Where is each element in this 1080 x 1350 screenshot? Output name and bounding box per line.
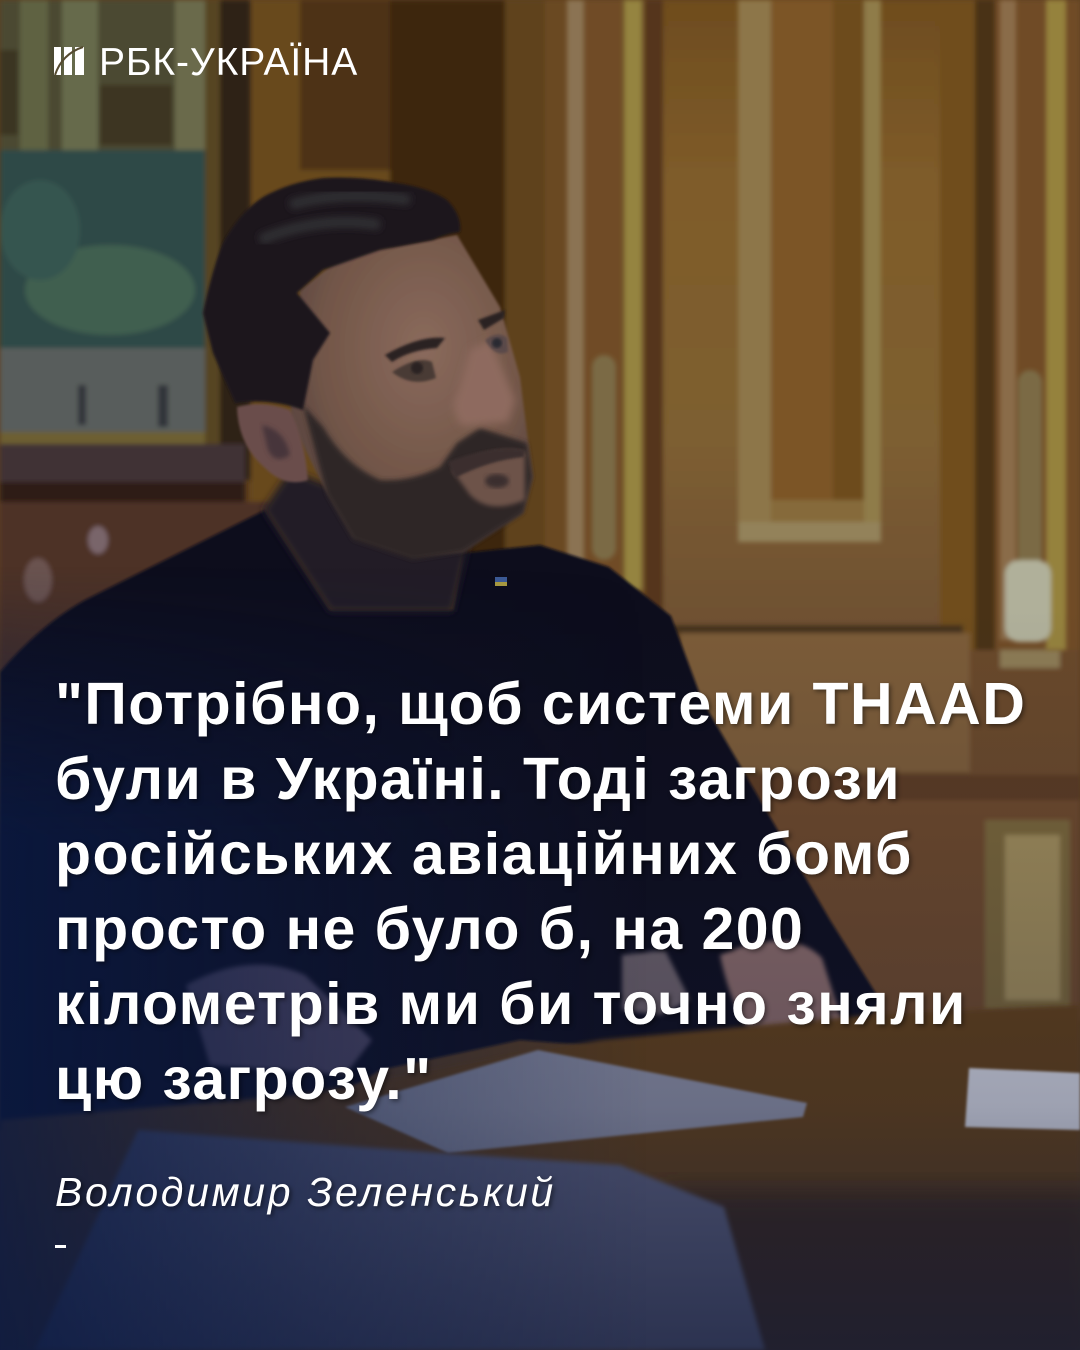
nose (454, 340, 515, 426)
ear (237, 404, 308, 482)
sheets of paper (345, 1050, 1080, 1153)
attribution: Володимир Зеленський (55, 1169, 556, 1215)
brows and eyes (385, 338, 445, 362)
figure: hands (186, 941, 848, 1075)
figure: torso in dark sweater (0, 510, 880, 1130)
logo mark (54, 46, 84, 75)
wood panelling (250, 0, 1080, 1020)
lips and chin (452, 450, 525, 506)
quote text: "Потрібно, щоб системи THAAD (55, 671, 1026, 737)
quote text: були в Україні. Тоді загрози (55, 746, 901, 812)
short dash (55, 1245, 66, 1248)
quote text: російських авіаційних бомб (55, 821, 913, 887)
quote text: просто не було б, на 200 (55, 896, 804, 962)
table (0, 1005, 1080, 1350)
quote text: кілометрів ми би точно зняли (55, 971, 967, 1037)
logo: РБК-Україна (54, 41, 358, 84)
face skin (290, 235, 533, 557)
logo wordmark: РБК-УКРАЇНА (99, 41, 358, 84)
figure: neck (263, 470, 470, 612)
hair (203, 178, 460, 410)
carved frame and gilded beading (567, 0, 1066, 650)
lapel pin (495, 577, 507, 586)
figure: head (203, 178, 533, 560)
beard (303, 405, 532, 560)
quote text (55, 671, 1026, 1116)
background painting in a dark frame (0, 0, 270, 672)
quote text: цю загрозу." (55, 1046, 433, 1112)
